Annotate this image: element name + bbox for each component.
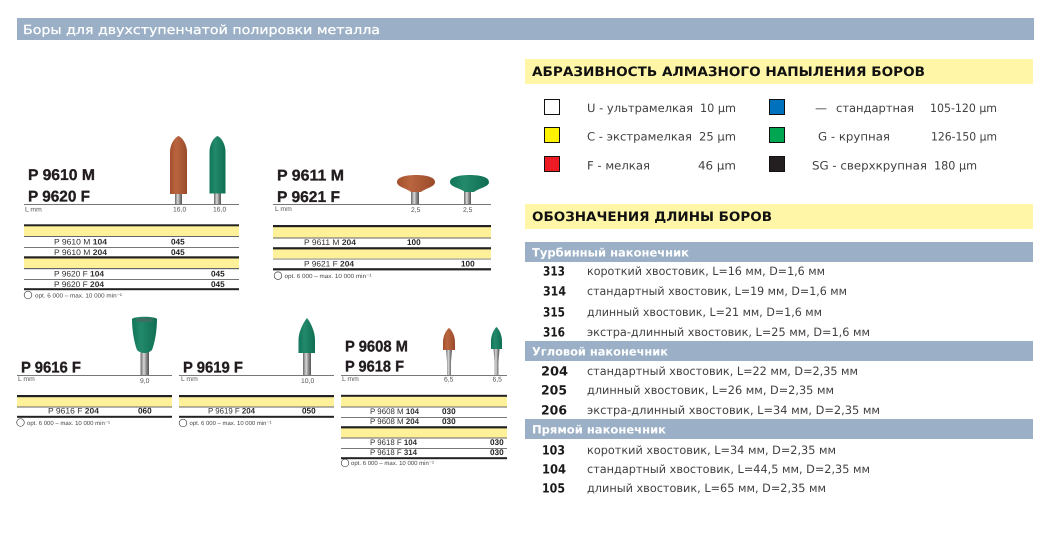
section: contra-angle handpiece (525, 341, 1033, 361)
size labels: L mm (25, 206, 42, 214)
row 204: стандартный хвостовик, L=22 мм, D=2,35 мм (587, 364, 858, 378)
panel: P 9610 M / P 9620 F (24, 136, 239, 300)
section: straight handpiece (525, 419, 1033, 439)
row 313: короткий хвостовик, L=16 мм, D=1,6 мм (587, 264, 825, 278)
size labels (179, 375, 334, 385)
speed note: opt. 6 000 – max. 10 000 min⁻¹ (35, 293, 122, 300)
speed note: opt. 6 000 – max. 10 000 min⁻¹ (284, 273, 372, 280)
icon: brown mushroom bur (397, 175, 435, 204)
heading: product codes: P 9608 M (345, 339, 408, 356)
legend: G coarse (770, 128, 997, 144)
legend: C extra fine: С - экстрамелкая (587, 130, 692, 144)
size labels (24, 204, 239, 214)
icon: brown bullet bur (170, 136, 187, 204)
legend: F fine (544, 156, 736, 172)
page header bar: Боры для двухступенчатой полировки металла (23, 22, 380, 37)
icon: green bullet bur (210, 136, 226, 204)
icon: small brown bur (443, 328, 455, 375)
table: order codes: 045 (171, 238, 185, 246)
legend: U ultra fine (544, 100, 736, 115)
table: order codes: 030 (490, 448, 504, 457)
speed note (17, 419, 110, 427)
section: contra-angle handpiece: Угловой наконечник (532, 344, 668, 358)
table: order codes: P 9611 M 204 (304, 238, 357, 247)
panel: bur length designations (525, 204, 1033, 496)
heading: abrasiveness: АБРАЗИВНОСТЬ АЛМАЗНОГО НАПЫЛЕНИЯ БОРОВ (532, 65, 925, 80)
heading: abrasiveness (525, 59, 1033, 84)
table: order codes: P 9621 F 204 (304, 260, 355, 269)
panel: P 9611 M / P 9621 F (273, 168, 491, 280)
row 105: длиный хвостовик, L=65 мм, D=2,35 мм (587, 481, 826, 495)
table: order codes: P 9618 F 104 (370, 438, 418, 447)
legend: C extra fine: 25 µm (699, 130, 736, 144)
row 104: стандартный хвостовик, L=44,5 мм, D=2,35 мм (587, 462, 870, 476)
size labels: L mm (275, 206, 292, 213)
table: order codes: P 9610 M 104 (54, 238, 108, 246)
table: order codes (341, 395, 507, 459)
heading: product codes: P 9621 F (277, 189, 340, 206)
table: order codes: P 9618 F 314 (370, 448, 418, 457)
heading: product code: P 9616 F (21, 360, 81, 377)
table: order codes (273, 225, 491, 270)
legend: C extra fine (544, 128, 736, 144)
table: order codes: 030 (442, 417, 456, 426)
table: order codes: P 9620 F 104 (54, 270, 105, 278)
size labels: 10,0 (301, 378, 314, 385)
size labels: L mm (181, 376, 198, 383)
table: order codes: P 9608 M 204 (370, 417, 420, 426)
table: order codes (17, 395, 172, 418)
heading: product code: P 9619 F (183, 360, 243, 377)
row 313: 313 (543, 264, 565, 278)
row 103: 103 (542, 442, 565, 458)
icon: green mushroom bur (450, 175, 489, 204)
speed note: opt. 6 000 – max. 10 000 min⁻¹ (27, 420, 110, 427)
heading: product codes: P 9610 M (28, 167, 95, 184)
row 315: длинный хвостовик, L=21 мм, D=1,6 мм (587, 305, 822, 319)
speed note (179, 419, 272, 427)
legend: F fine: F - мелкая (587, 158, 650, 172)
section: straight handpiece: Прямой наконечник (532, 422, 666, 436)
table: order codes: 050 (302, 406, 316, 416)
heading: length designations: ОБОЗНАЧЕНИЯ ДЛИНЫ БОРОВ (532, 210, 772, 225)
speed note (274, 272, 372, 280)
panel: P 9608 M / P 9618 F (341, 327, 507, 467)
table: order codes: 030 (490, 438, 504, 447)
icon: small green bur (491, 327, 502, 375)
heading: product codes: P 9618 F (345, 359, 404, 376)
table: order codes: 045 (171, 248, 185, 257)
table: order codes: 030 (442, 407, 456, 416)
row 316: 316 (543, 324, 565, 340)
row 104: 104 (542, 462, 566, 476)
legend: U ultra fine: U - ультрамелкая (587, 101, 693, 115)
size labels: L mm (18, 376, 35, 383)
table: order codes: 045 (211, 280, 225, 289)
legend: standard: — (815, 101, 827, 115)
size labels: 6,5 (444, 376, 454, 384)
heading: product codes: P 9620 F (28, 189, 90, 206)
row 103: короткий хвостовик, L=34 мм, D=2,35 мм (587, 443, 836, 457)
icon: green cup bur (132, 317, 157, 375)
table: order codes: P 9608 M 104 (370, 407, 420, 416)
legend: standard (770, 100, 997, 115)
row 316: экстра-длинный хвостовик, L=25 мм, D=1,6 мм (587, 325, 870, 339)
legend: SG super coarse (770, 156, 977, 172)
speed note (24, 291, 122, 300)
legend: SG super coarse: 180 µm (934, 158, 977, 172)
table: order codes: P 9616 F 204 (48, 406, 100, 416)
table: order codes (179, 395, 334, 418)
legend: U ultra fine: 10 µm (700, 101, 736, 115)
panel: P 9619 F (179, 318, 334, 427)
row 206: 206 (541, 402, 567, 418)
row 204: 204 (541, 364, 568, 378)
size labels: 2,5 (463, 207, 473, 214)
row 315: 315 (543, 304, 565, 320)
section: turbine handpiece: Турбинный наконечник (532, 246, 689, 260)
page header bar (17, 18, 1034, 40)
speed note: opt. 6 000 – max. 10 000 min⁻¹ (190, 420, 272, 427)
legend: SG super coarse: SG - сверхкрупная (812, 158, 927, 172)
heading: product codes (28, 167, 95, 206)
heading: product codes (345, 339, 408, 376)
table: order codes: 060 (138, 406, 152, 416)
row 205: длинный хвостовик, L=26 мм, D=2,35 мм (587, 383, 834, 397)
size labels: L mm (342, 376, 359, 383)
icon: green pointed bur (298, 318, 315, 375)
table: order codes: P 9619 F 204 (208, 406, 256, 416)
size labels (273, 204, 491, 214)
table: order codes: 100 (407, 238, 421, 247)
size labels: 16,0 (213, 206, 226, 214)
size labels: 9,0 (140, 378, 150, 385)
legend: standard: стандартная (836, 101, 914, 115)
size labels: 16,0 (173, 206, 186, 214)
table: order codes: 100 (461, 260, 475, 269)
size labels (341, 375, 507, 384)
legend: F fine: 46 µm (698, 158, 736, 172)
row 314: стандартный хвостовик, L=19 мм, D=1,6 мм (587, 284, 847, 298)
table: order codes: P 9610 M 204 (54, 248, 108, 257)
row 105: 105 (542, 480, 565, 496)
heading: length designations (525, 204, 1033, 229)
table: order codes (24, 224, 239, 290)
row 205: 205 (541, 382, 567, 398)
legend: G coarse: 126-150 µm (931, 130, 997, 144)
row 206: экстра-длинный хвостовик, L=34 мм, D=2,35 мм (587, 403, 880, 417)
size labels: 2,5 (411, 207, 421, 214)
legend: G coarse: G - крупная (818, 130, 890, 144)
legend: standard: 105-120 µm (930, 101, 997, 115)
size labels: 6,5 (492, 376, 502, 384)
section: turbine handpiece (525, 242, 1033, 262)
speed note (341, 459, 434, 467)
panel: P 9616 F (17, 317, 172, 427)
speed note: opt. 6 000 – max. 10 000 min⁻¹ (351, 460, 434, 467)
row 314: 314 (543, 284, 566, 298)
panel: diamond coating abrasiveness (525, 59, 1033, 172)
size labels (17, 375, 172, 385)
heading: product codes (277, 168, 344, 206)
heading: product codes: P 9611 M (277, 168, 344, 185)
table: order codes: 045 (211, 270, 225, 278)
table: order codes: P 9620 F 204 (54, 280, 105, 289)
